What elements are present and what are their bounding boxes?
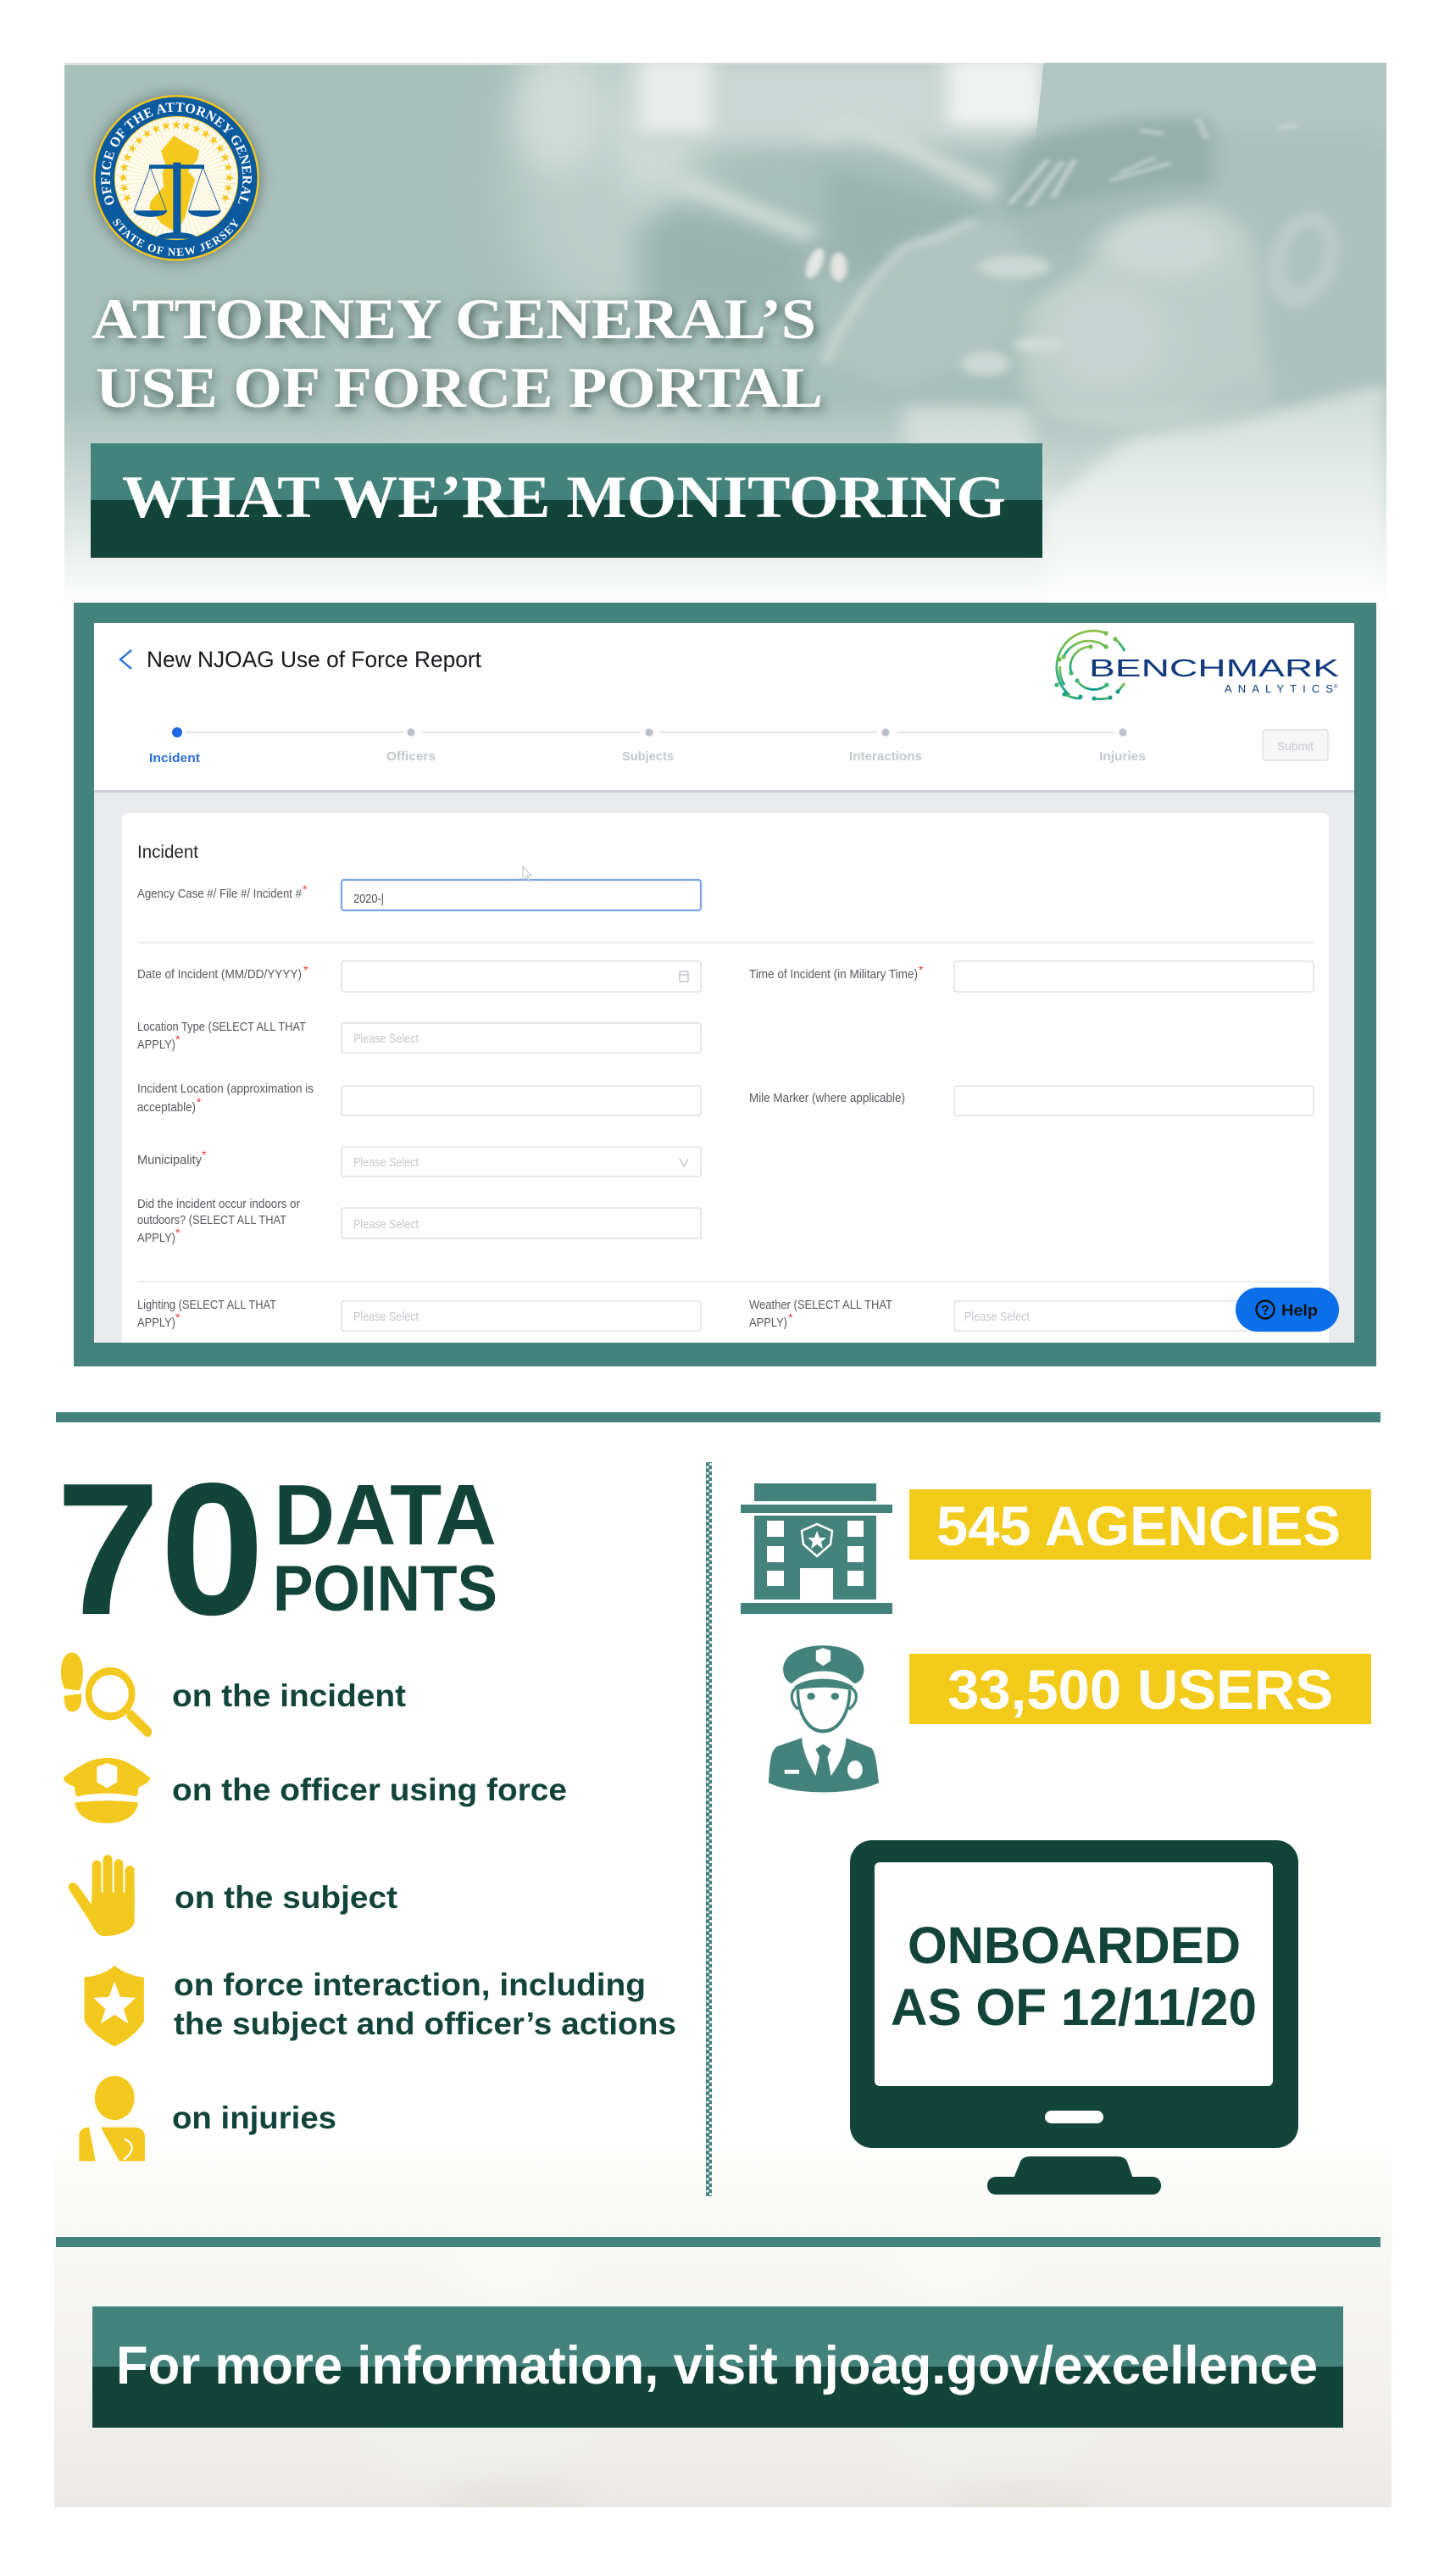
- field: time of incident: [749, 961, 1314, 992]
- field: location type: [137, 1021, 701, 1053]
- stat: 33,500 users: 33,500 USERS: [947, 1658, 1333, 1721]
- field: indoors or outdoors: [137, 1198, 701, 1245]
- field: location type: Location Type (SELECT ALL THAT: [137, 1021, 306, 1034]
- field: municipality: [137, 1147, 701, 1177]
- list item: on injuries: on injuries: [172, 2100, 336, 2135]
- field: agency case: 2020-|: [353, 893, 384, 906]
- progress stepper: Incident: [149, 751, 200, 765]
- title: Attorney General's Use of Force Portal: USE OF FORCE PORTAL: [96, 355, 823, 420]
- field: lighting: [137, 1299, 701, 1331]
- icon: shield with star: [84, 1966, 144, 2046]
- field: weather: Please Select: [964, 1310, 1030, 1324]
- top rule: [56, 1412, 1381, 1422]
- field: weather: Weather (SELECT ALL THAT: [749, 1299, 892, 1312]
- progress stepper: Officers: [386, 749, 436, 764]
- field: agency case: [137, 866, 701, 910]
- hero photo background: saluting officer: [64, 34, 1387, 606]
- list item: on the subject: [69, 1855, 397, 1936]
- field: agency case: Agency Case #/ File #/ Incident #: [137, 887, 302, 901]
- footer banner: more information: [92, 2306, 1343, 2428]
- field: mile marker: [749, 1086, 1314, 1116]
- field: agency case: *: [303, 882, 308, 896]
- progress stepper: Injuries: [1099, 749, 1146, 764]
- list item: on injuries: [79, 2076, 336, 2162]
- logo: Benchmark Analytics: ANALYTICS: [1225, 682, 1333, 695]
- field: weather: *: [788, 1310, 793, 1324]
- logo: Benchmark Analytics: ®: [1334, 684, 1338, 690]
- field: lighting: Lighting (SELECT ALL THAT: [137, 1299, 276, 1312]
- list item: on the incident: [61, 1653, 406, 1732]
- field: lighting: Please Select: [353, 1310, 419, 1324]
- banner: What We're Monitoring: WHAT WE’RE MONITORING: [122, 465, 1006, 531]
- headline: 70 data points: DATA: [274, 1468, 497, 1563]
- field: date of incident: Date of Incident (MM/DD/YYYY): [137, 968, 302, 982]
- field: location type: APPLY): [137, 1038, 175, 1052]
- monitor: onboarded as of 12/11/20: AS OF 12/11/20: [891, 1978, 1257, 2036]
- bottom rule: [56, 2237, 1381, 2247]
- stat: 545 agencies: [741, 1483, 1371, 1614]
- logo: Benchmark Analytics: BENCHMARK: [1089, 655, 1340, 682]
- field: time of incident: *: [919, 963, 924, 976]
- footer banner: more information: For more information, visit njoag.gov/excellence: [116, 2336, 1318, 2395]
- list item: on the officer using force: on the officer using force: [172, 1772, 567, 1807]
- headline: 70 data points: [56, 1444, 497, 1655]
- stat: 33,500 users: [769, 1645, 1371, 1792]
- seal: Office of the Attorney General: [85, 86, 268, 270]
- list item: on force interaction: the subject and officer’s actions: [174, 2006, 676, 2041]
- form card: Incident: [137, 843, 198, 862]
- field: municipality: Municipality: [137, 1154, 203, 1167]
- field: time of incident: Time of Incident (in Military Time): [749, 968, 918, 982]
- monitor: onboarded as of 12/11/20: ONBOARDED: [908, 1917, 1241, 1974]
- title: Attorney General's Use of Force Portal: ATTORNEY GENERAL’S: [92, 287, 816, 351]
- field: weather: [749, 1299, 1314, 1331]
- logo: Benchmark Analytics: [1054, 631, 1340, 701]
- field: municipality: Please Select: [353, 1156, 419, 1170]
- field: indoors or outdoors: Please Select: [353, 1218, 419, 1232]
- banner: What We're Monitoring: [91, 443, 1042, 558]
- headline: 70 data points: POINTS: [273, 1553, 497, 1625]
- progress stepper: [149, 727, 1146, 765]
- headline: 70 data points: 70: [56, 1444, 264, 1655]
- icon: police station: [741, 1483, 892, 1614]
- field: incident location: *: [197, 1095, 202, 1109]
- field: indoors or outdoors: Did the incident occur indoors or: [137, 1198, 300, 1211]
- help button: ?: [1261, 1304, 1269, 1318]
- field: date of incident: *: [303, 963, 308, 976]
- help button: [1236, 1288, 1339, 1332]
- panel: portal screenshot: [74, 603, 1376, 1366]
- progress stepper: Subjects: [622, 749, 674, 764]
- stat: 545 agencies: 545 AGENCIES: [936, 1494, 1341, 1557]
- form card: [122, 813, 1329, 1343]
- monitor: onboarded as of 12/11/20: [850, 1840, 1298, 2195]
- icon: raised hand: [69, 1855, 135, 1936]
- field: incident location: acceptable): [137, 1101, 196, 1115]
- field: indoors or outdoors: APPLY): [137, 1232, 175, 1245]
- field: indoors or outdoors: outdoors? (SELECT ALL THAT: [137, 1214, 286, 1227]
- list item: on force interaction: on force interaction, including: [174, 1967, 646, 2002]
- field: location type: Please Select: [353, 1032, 419, 1046]
- list item: on force interaction: [84, 1966, 676, 2046]
- field: date of incident: [137, 961, 701, 992]
- footer photo texture: [54, 2202, 1392, 2507]
- icon: officer portrait: [769, 1645, 879, 1792]
- field: municipality: *: [202, 1148, 207, 1161]
- seal: Office of the Attorney General: STATE OF NEW JERSEY: [113, 219, 239, 256]
- field: incident location: [137, 1082, 701, 1116]
- icon: person with arm sling: [79, 2076, 145, 2162]
- field: mile marker: Mile Marker (where applicable): [749, 1092, 905, 1105]
- list item: on the subject: on the subject: [175, 1880, 397, 1915]
- submit button: Submit: [1277, 739, 1314, 753]
- field: lighting: *: [175, 1310, 181, 1324]
- list item: on the incident: on the incident: [172, 1678, 406, 1713]
- title: Attorney General's Use of Force Portal: [92, 287, 823, 420]
- field: indoors or outdoors: *: [175, 1226, 181, 1239]
- field: weather: APPLY): [749, 1316, 787, 1330]
- list item: on the officer using force: [63, 1758, 567, 1823]
- icon: footprint and magnifier: [61, 1653, 147, 1732]
- dotted divider: [706, 1462, 712, 2196]
- seal: Office of the Attorney General: OFFICE OF THE ATTORNEY GENERAL: [101, 102, 252, 205]
- progress stepper: Interactions: [849, 749, 922, 764]
- field: incident location: Incident Location (approximation is: [137, 1082, 314, 1096]
- submit button: [1263, 730, 1328, 760]
- icon: police cap: [63, 1758, 151, 1823]
- field: location type: *: [175, 1032, 181, 1046]
- report title with back arrow: New NJOAG Use of Force Report: [147, 647, 481, 672]
- field: lighting: APPLY): [137, 1316, 175, 1330]
- help button: Help: [1281, 1302, 1318, 1319]
